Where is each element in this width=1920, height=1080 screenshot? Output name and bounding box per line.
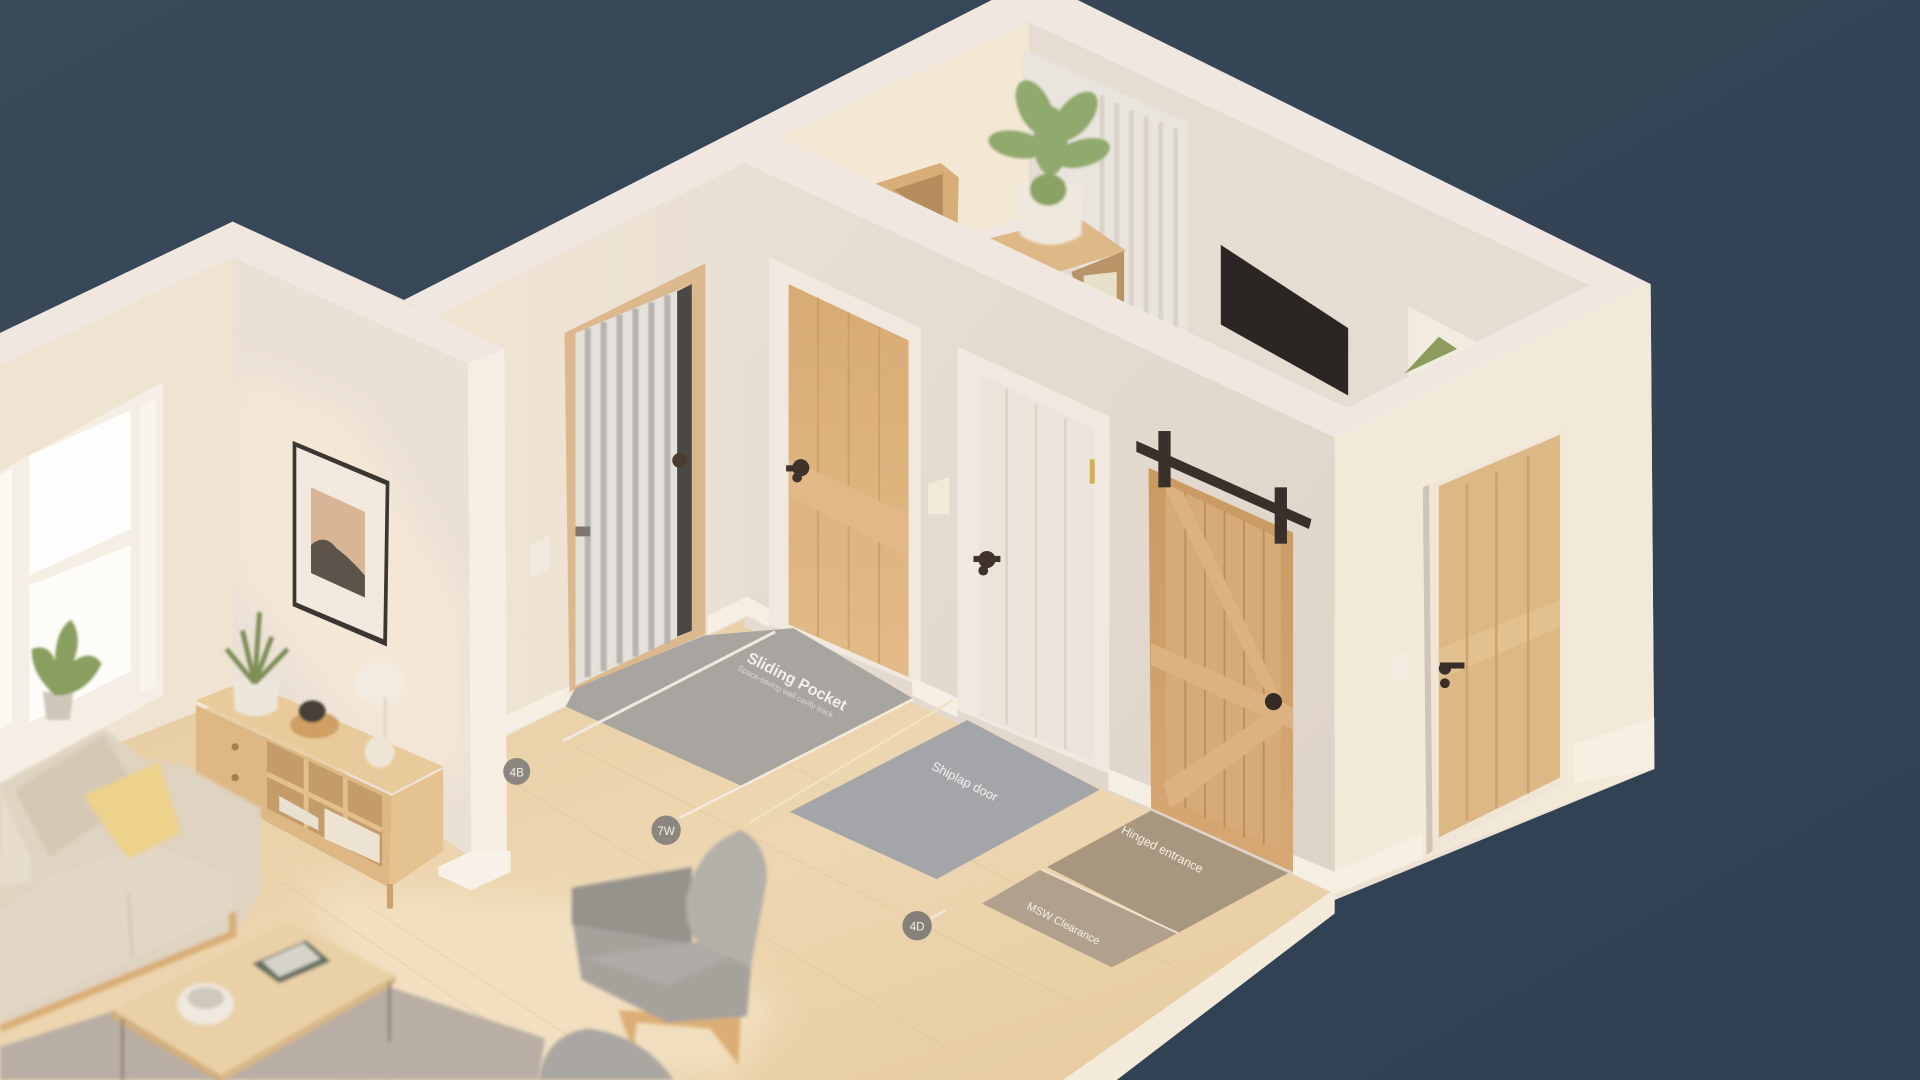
skirting boards: [504, 596, 1335, 894]
door 1 handle: [672, 453, 687, 468]
mat 4 title: MSW Clearance: [1025, 901, 1102, 948]
floor mat 2 with label: [790, 720, 1100, 879]
badge 4D: [902, 910, 947, 940]
door 3 handle: [973, 551, 1000, 576]
cabinet: [196, 681, 443, 909]
wall caps: [0, 0, 1651, 438]
door 4 knob: [1265, 693, 1282, 710]
hallway wall, left: [435, 163, 744, 737]
cabinet leg: [387, 884, 393, 909]
room tv: [1221, 245, 1348, 396]
table lamp: [355, 662, 404, 768]
right exterior wall: [1335, 284, 1654, 894]
mat 1 subtitle: Space-saving wall cavity track: [736, 664, 835, 720]
door 5 handle: [1439, 662, 1464, 688]
badge 4B: [503, 758, 530, 785]
divider wall cap: [744, 137, 1347, 438]
mat 3 title: Hinged entrance: [1119, 823, 1206, 876]
slab front edge: [1063, 889, 1335, 1080]
cabinet bowl and stones: [290, 700, 339, 738]
mat 1 title: Sliding Pocket: [744, 650, 850, 715]
room back wall: [778, 22, 1029, 233]
door 1: folding slat door: [564, 263, 705, 692]
badge 7W: [651, 816, 681, 845]
hallway wall, main: [744, 163, 1335, 894]
sofa: [0, 729, 261, 1029]
wall switch plates: [530, 407, 1408, 683]
cabinet potted grass: [227, 612, 288, 716]
door 5: exterior wood door: [1423, 429, 1567, 855]
door 3: white panel door: [958, 347, 1109, 774]
mat 2 title: Shiplap door: [929, 758, 1001, 805]
room radiator: [1022, 49, 1188, 337]
room small picture: [1404, 306, 1478, 377]
floor mat 4 with label: [982, 869, 1178, 967]
leader lines: [680, 699, 953, 823]
room side wall: [1029, 22, 1589, 408]
rug: [0, 980, 545, 1080]
room wooden crate: [876, 163, 959, 229]
floor: [0, 616, 1335, 1080]
floor mat 3 with label: [1047, 811, 1288, 933]
room shelf: [977, 217, 1127, 312]
cabinet drawer knobs: [231, 743, 239, 781]
left room wall: [233, 257, 471, 857]
cabinet shelves: [267, 741, 382, 867]
mat 1 dividing line: [563, 632, 775, 741]
pillar end face: [438, 349, 511, 890]
foreground ottoman: [539, 1029, 673, 1080]
door 2 handle: [786, 459, 809, 482]
window: [0, 382, 163, 784]
barn door rail and hangers: [1136, 431, 1311, 544]
badge 7W: 7W: [657, 825, 675, 838]
door 2: wooden panel door: [769, 257, 921, 686]
table book: [252, 940, 331, 983]
back room interior: [744, 22, 1589, 438]
table bowl: [178, 983, 234, 1025]
coffee table: [113, 921, 396, 1080]
room plant: [986, 74, 1113, 245]
door 1 small latch: [576, 527, 590, 536]
sofa yellow cushion: [83, 762, 181, 860]
floor mat 1 with label: [563, 628, 912, 786]
door 3 yellow key: [1090, 459, 1095, 484]
badge 4B: 4B: [510, 766, 524, 779]
wall painting: [293, 441, 389, 647]
armchair: [572, 830, 767, 1065]
door 4: sliding barn door: [1136, 431, 1311, 872]
badge 4D: 4D: [910, 921, 925, 934]
far left wall: [0, 257, 233, 790]
window plant: [32, 620, 102, 720]
